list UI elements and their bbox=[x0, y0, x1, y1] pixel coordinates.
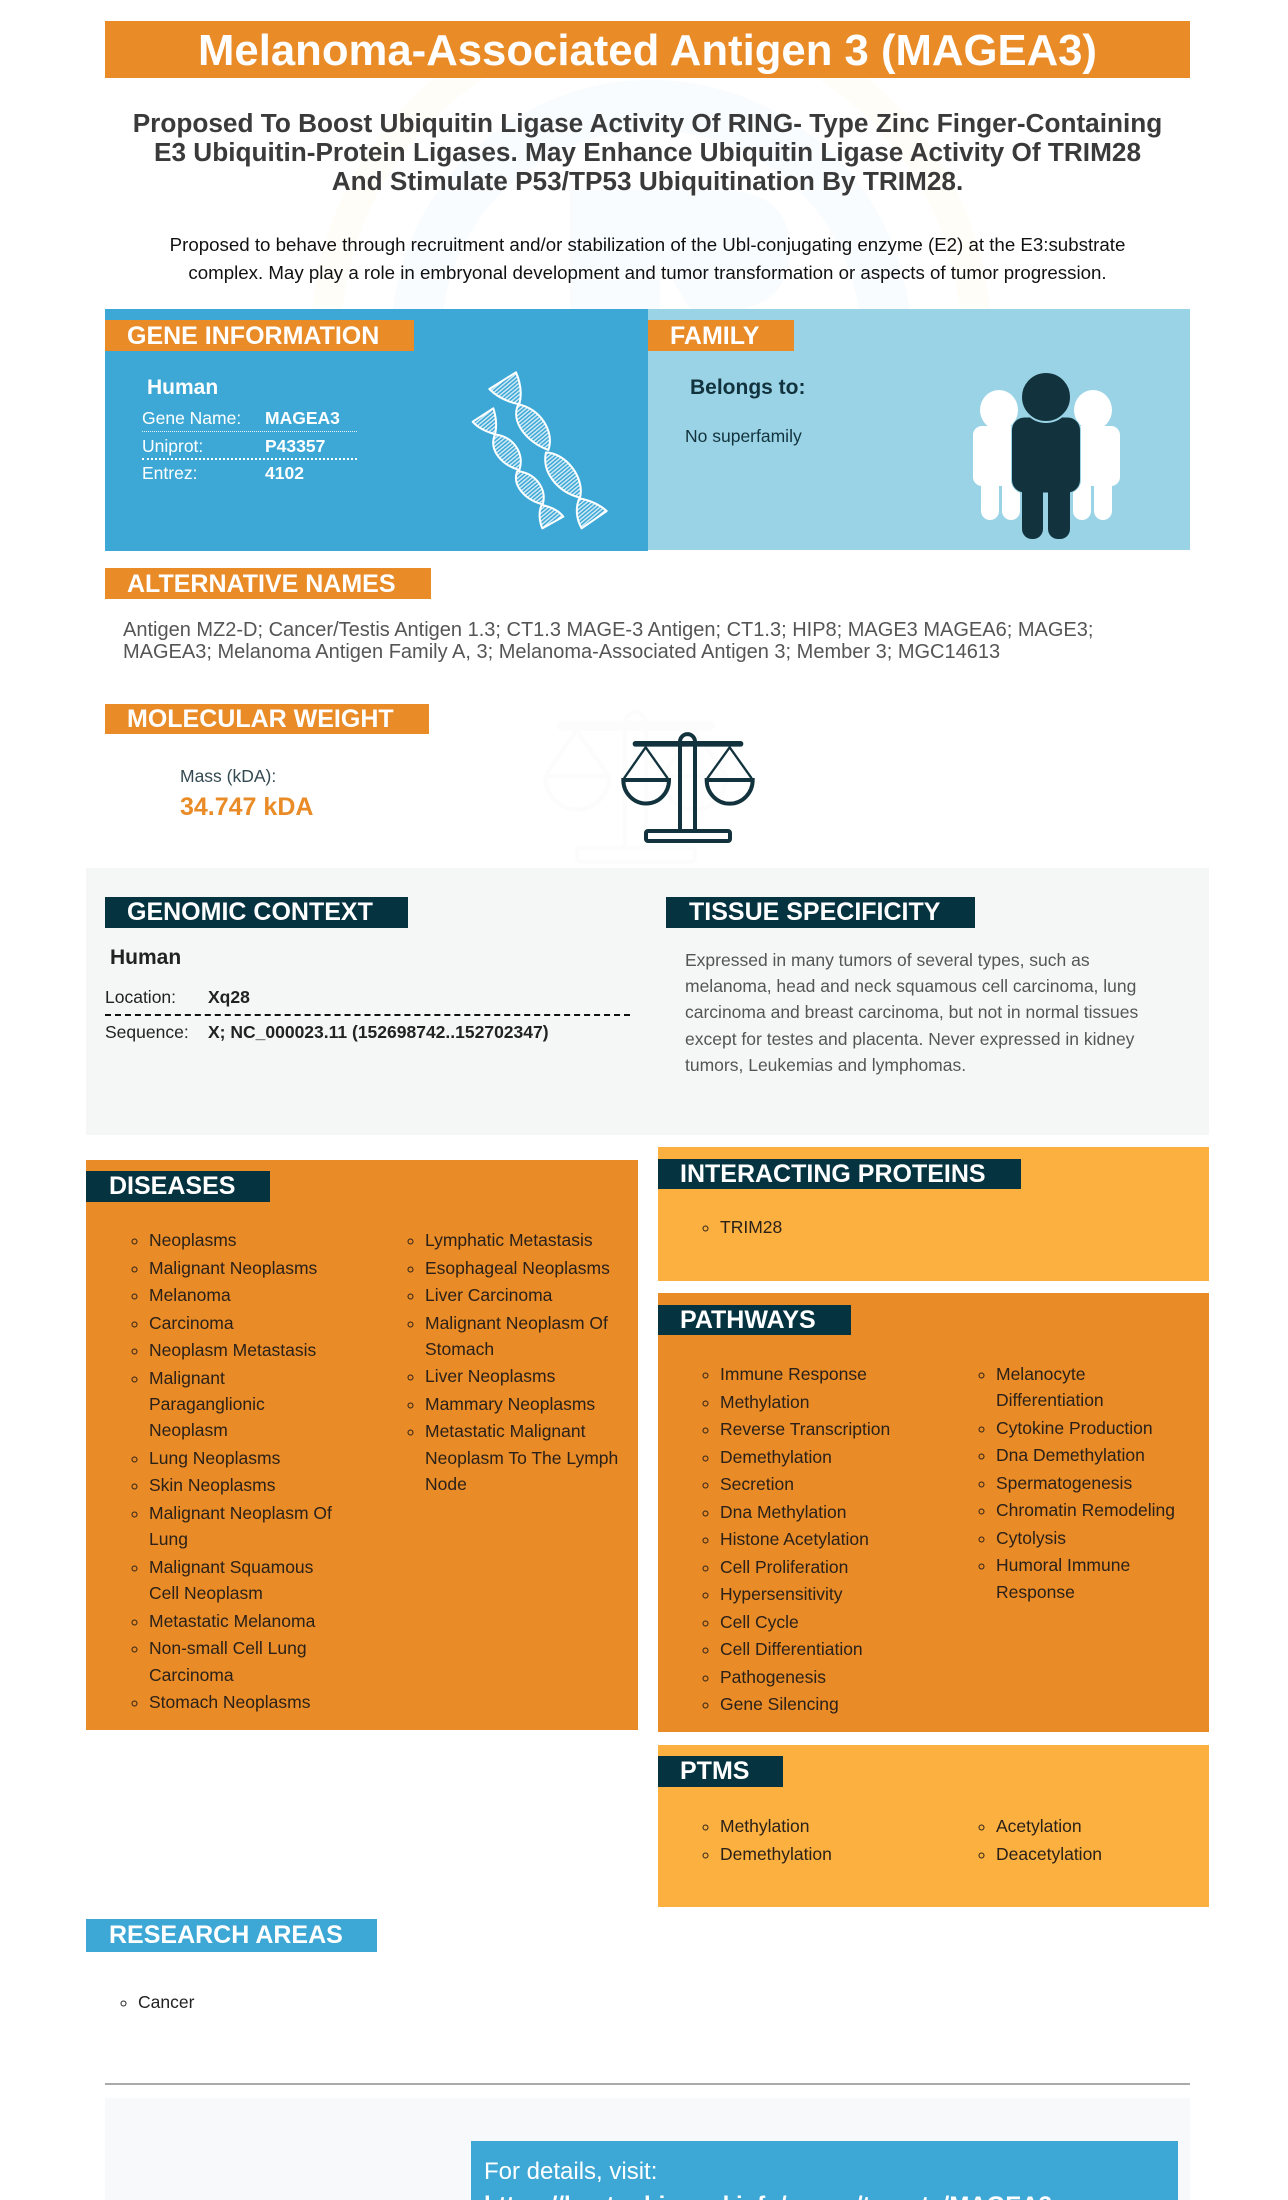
list: pathways column 1: Methylation bbox=[720, 1392, 810, 1412]
list: pathways column 1: Pathogenesis bbox=[720, 1666, 826, 1686]
list: diseases column 1: Cell Neoplasm bbox=[149, 1583, 263, 1603]
heading: diseases bbox=[86, 1171, 270, 1202]
list: pathways column 1: Immune Response bbox=[720, 1364, 867, 1384]
list: diseases column 1 bbox=[132, 1230, 332, 1712]
gene name row bbox=[142, 408, 357, 432]
family value: No superfamily bbox=[685, 426, 802, 446]
list: diseases column 1: Malignant Neoplasms bbox=[149, 1258, 317, 1278]
list: diseases column 2: Malignant Neoplasm Of bbox=[425, 1312, 608, 1332]
alternative names text: Antigen MZ2-D; Cancer/Testis Antigen 1.3; CT1.3 MAGE-3 Antigen; CT1.3; HIP8; MAGE3 MAGEA6; MAGE3; bbox=[123, 619, 1093, 641]
list: diseases column 1: Neoplasms bbox=[149, 1230, 237, 1250]
heading: diseases: DISEASES bbox=[109, 1172, 235, 1200]
panel: interacting proteins bbox=[658, 1147, 1209, 1281]
species label: Human bbox=[110, 946, 181, 969]
list: ptms column 1: Methylation bbox=[720, 1816, 810, 1836]
tissue specificity text: Expressed in many tumors of several types, such as bbox=[685, 950, 1090, 970]
title: Melanoma-Associated Antigen 3 (MAGEA3) bbox=[198, 26, 1097, 75]
list: diseases column 1: Carcinoma bbox=[149, 1312, 234, 1332]
list: ptms column 2 bbox=[978, 1816, 1102, 1864]
uniprot row: P43357 bbox=[265, 436, 325, 456]
tissue specificity text: carcinoma and breast carcinoma, but not in normal tissues bbox=[685, 1002, 1138, 1022]
panel: genomic context and tissue specificity bbox=[86, 868, 1209, 1135]
heading: interacting proteins: INTERACTING PROTEINS bbox=[680, 1160, 986, 1188]
tissue specificity text bbox=[685, 950, 1138, 1075]
heading: gene information: GENE INFORMATION bbox=[127, 322, 379, 350]
list: diseases column 2: Liver Neoplasms bbox=[425, 1366, 555, 1386]
list: pathways column 2: Cytokine Production bbox=[996, 1418, 1153, 1438]
list: diseases column 2: Mammary Neoplasms bbox=[425, 1394, 595, 1414]
list: pathways column 2 bbox=[978, 1364, 1175, 1602]
list: diseases column 2 bbox=[408, 1230, 618, 1494]
gene name row: Gene Name: bbox=[142, 408, 241, 428]
list: diseases column 2: Neoplasm To The Lymph bbox=[425, 1448, 618, 1468]
list: diseases column 1: Neoplasm Metastasis bbox=[149, 1340, 316, 1360]
list: research areas: Cancer bbox=[138, 1992, 194, 2012]
subtitle: E3 Ubiquitin-Protein Ligases. May Enhance Ubiquitin Ligase Activity Of TRIM28 bbox=[154, 137, 1141, 167]
panel: footer bbox=[105, 2098, 1190, 2200]
list: diseases column 2: Liver Carcinoma bbox=[425, 1285, 552, 1305]
icon: balance scale bbox=[621, 732, 755, 843]
list: diseases column 1: Metastatic Melanoma bbox=[149, 1611, 315, 1631]
alternative names text bbox=[123, 619, 1093, 663]
panel: gene information bbox=[105, 309, 648, 551]
tissue specificity text: except for testes and placenta. Never expressed in kidney bbox=[685, 1029, 1134, 1049]
list: diseases column 1: Paraganglionic bbox=[149, 1394, 265, 1414]
list: pathways column 2: Humoral Immune bbox=[996, 1555, 1130, 1575]
list: pathways column 1: Gene Silencing bbox=[720, 1694, 839, 1714]
sequence row: Sequence: bbox=[105, 1022, 189, 1042]
list: pathways column 1: Cell Cycle bbox=[720, 1612, 799, 1632]
heading: alternative names: ALTERNATIVE NAMES bbox=[127, 570, 396, 598]
list: diseases column 2: Node bbox=[425, 1474, 467, 1494]
location row: Location: bbox=[105, 987, 176, 1007]
background watermark bbox=[0, 78, 1288, 309]
list: pathways column 2: Chromatin Remodeling bbox=[996, 1500, 1175, 1520]
list: diseases column 1: Carcinoma bbox=[149, 1665, 234, 1685]
list: pathways column 1: Cell Proliferation bbox=[720, 1556, 848, 1576]
list: pathways column 2: Differentiation bbox=[996, 1390, 1104, 1410]
list: interacting proteins: TRIM28 bbox=[720, 1217, 782, 1237]
location row bbox=[105, 987, 630, 1016]
list: pathways column 1: Demethylation bbox=[720, 1446, 832, 1466]
list: diseases column 2: Lymphatic Metastasis bbox=[425, 1230, 593, 1250]
entrez row: 4102 bbox=[265, 463, 304, 483]
callout: details link bbox=[471, 2141, 1178, 2200]
list: diseases column 1: Malignant bbox=[149, 1368, 225, 1388]
list: pathways column 1: Hypersensitivity bbox=[720, 1584, 843, 1604]
heading: ptms: PTMS bbox=[680, 1757, 749, 1785]
icon: people bbox=[973, 373, 1120, 539]
belongs to label: Belongs to: bbox=[690, 376, 806, 399]
list: diseases column 1: Stomach Neoplasms bbox=[149, 1692, 310, 1712]
list: diseases column 1: Melanoma bbox=[149, 1285, 231, 1305]
list: diseases column 1: Lung Neoplasms bbox=[149, 1448, 280, 1468]
species label: Human bbox=[147, 376, 218, 399]
list: pathways column 1: Secretion bbox=[720, 1474, 794, 1494]
list: diseases column 1: Skin Neoplasms bbox=[149, 1475, 275, 1495]
list: ptms column 1: Demethylation bbox=[720, 1844, 832, 1864]
description bbox=[170, 234, 1125, 283]
panel: ptms bbox=[658, 1745, 1209, 1907]
list: ptms column 2: Acetylation bbox=[996, 1816, 1082, 1836]
list: pathways column 2: Cytolysis bbox=[996, 1528, 1066, 1548]
list: pathways column 2: Melanocyte bbox=[996, 1364, 1086, 1384]
sequence row: X; NC_000023.11 (152698742..152702347) bbox=[208, 1022, 549, 1042]
heading: research areas: RESEARCH AREAS bbox=[109, 1921, 343, 1949]
panel: diseases bbox=[86, 1160, 638, 1730]
heading: tissue specificity: TISSUE SPECIFICITY bbox=[689, 898, 940, 926]
details label: For details, visit: bbox=[484, 2158, 657, 2185]
location row: Xq28 bbox=[208, 987, 250, 1007]
list: pathways column 1: Dna Methylation bbox=[720, 1502, 846, 1522]
divider line bbox=[105, 2083, 1190, 2085]
mass label: Mass (kDA): bbox=[180, 766, 276, 786]
icon: dna helix bbox=[472, 371, 608, 530]
gene name row: MAGEA3 bbox=[265, 408, 340, 428]
tissue specificity text: melanoma, head and neck squamous cell carcinoma, lung bbox=[685, 976, 1136, 996]
list: diseases column 2: Esophageal Neoplasms bbox=[425, 1258, 610, 1278]
description: Proposed to behave through recruitment and/or stabilization of the Ubl-conjugating enzyme (E2) at the E3:substrate bbox=[170, 234, 1125, 255]
list: pathways column 2: Response bbox=[996, 1582, 1075, 1602]
list: ptms column 1 bbox=[702, 1816, 832, 1864]
description: complex. May play a role in embryonal development and tumor transformation or aspects of tumor progression. bbox=[188, 262, 1107, 283]
list: diseases column 2: Stomach bbox=[425, 1339, 494, 1359]
heading: pathways bbox=[658, 1305, 851, 1335]
heading: research areas bbox=[86, 1919, 377, 1952]
heading: family: FAMILY bbox=[670, 322, 759, 350]
alternative names text: MAGEA3; Melanoma Antigen Family A, 3; Melanoma-Associated Antigen 3; Member 3; MGC14613 bbox=[123, 641, 1000, 663]
list: diseases column 1: Malignant Neoplasm Of bbox=[149, 1503, 332, 1523]
entrez row: Entrez: bbox=[142, 463, 197, 483]
list: pathways column 1: Histone Acetylation bbox=[720, 1529, 869, 1549]
heading: family bbox=[648, 320, 794, 351]
list: diseases column 2: Metastatic Malignant bbox=[425, 1421, 586, 1441]
uniprot row: Uniprot: bbox=[142, 436, 203, 456]
mass value: 34.747 kDA bbox=[180, 793, 313, 821]
list: pathways column 1 bbox=[702, 1364, 890, 1714]
entrez row bbox=[142, 463, 304, 483]
heading: genomic context: GENOMIC CONTEXT bbox=[127, 898, 373, 926]
list: pathways column 2: Dna Demethylation bbox=[996, 1445, 1145, 1465]
list: pathways column 2: Spermatogenesis bbox=[996, 1473, 1132, 1493]
list: pathways column 1: Cell Differentiation bbox=[720, 1639, 863, 1659]
heading: pathways: PATHWAYS bbox=[680, 1306, 816, 1334]
list: diseases column 1: Neoplasm bbox=[149, 1420, 228, 1440]
tissue specificity text: tumors, Leukemias and lymphomas. bbox=[685, 1055, 966, 1075]
list: diseases column 1: Malignant Squamous bbox=[149, 1557, 313, 1577]
uniprot row bbox=[142, 436, 357, 460]
subtitle: Proposed To Boost Ubiquitin Ligase Activity Of RING- Type Zinc Finger-Containing bbox=[133, 108, 1162, 138]
panel: family bbox=[648, 309, 1190, 550]
panel: pathways bbox=[658, 1293, 1209, 1732]
heading: molecular weight: MOLECULAR WEIGHT bbox=[127, 705, 394, 733]
list: pathways column 1: Reverse Transcription bbox=[720, 1419, 890, 1439]
subtitle bbox=[133, 108, 1162, 196]
list: diseases column 1: Lung bbox=[149, 1529, 188, 1549]
list: ptms column 2: Deacetylation bbox=[996, 1844, 1102, 1864]
subtitle: And Stimulate P53/TP53 Ubiquitination By TRIM28. bbox=[332, 166, 963, 196]
heading: ptms bbox=[658, 1756, 783, 1787]
list: diseases column 1: Non-small Cell Lung bbox=[149, 1638, 307, 1658]
